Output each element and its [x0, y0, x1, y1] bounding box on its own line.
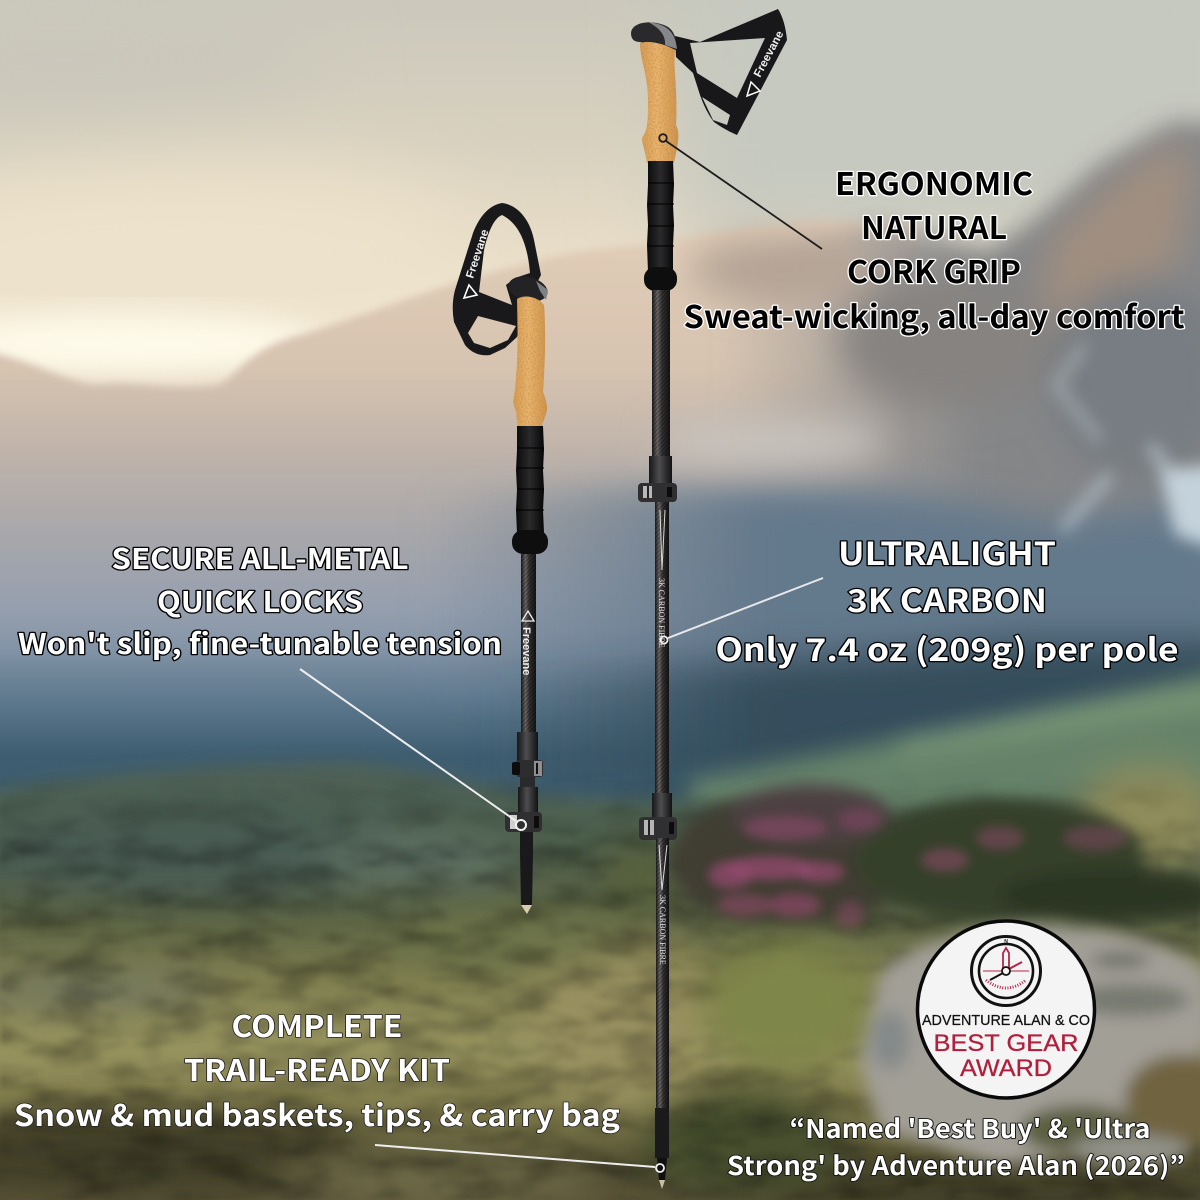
cork grip — [640, 42, 678, 163]
text block: kit — [14, 1004, 620, 1135]
palm cap — [631, 22, 677, 50]
badge text: BEST GEAR — [934, 1030, 1078, 1057]
text block: locks: QUICK LOCKS — [157, 580, 363, 621]
snow streaks — [1056, 345, 1200, 550]
icon: compass clock — [972, 936, 1040, 1006]
wrist strap, left pole — [453, 203, 541, 355]
award quote — [727, 1109, 1185, 1183]
rhododendron bushes — [670, 785, 1200, 928]
award badge — [918, 921, 1094, 1098]
badge text: ADVENTURE ALAN & CO — [922, 1013, 1090, 1029]
badge text: AWARD — [960, 1055, 1052, 1082]
foam grip — [512, 426, 548, 554]
text block: carbon: ULTRALIGHT — [838, 529, 1056, 575]
palm cap — [506, 273, 550, 305]
distant green slope — [690, 668, 1200, 850]
text block: carbon: Only 7.4 oz (209g) per pole — [716, 625, 1178, 671]
text block: locks: SECURE ALL-METAL — [112, 537, 409, 578]
callout leader: locks — [300, 669, 526, 830]
pole tip — [655, 1108, 669, 1189]
text block: carbon: 3K CARBON — [847, 576, 1047, 622]
icon: compass clock: N — [1004, 939, 1008, 945]
carbon shaft, lower — [656, 838, 669, 1108]
carbon shaft: Freevane — [520, 627, 532, 675]
text block: kit: TRAIL-READY KIT — [184, 1048, 450, 1090]
foam grip — [644, 161, 677, 291]
right trekking pole, extended — [631, 9, 787, 1189]
cork grip — [513, 297, 547, 428]
text block: kit: Snow & mud baskets, tips, & carry bag — [14, 1093, 620, 1135]
foreground hillside — [0, 762, 1200, 1200]
mountain mass — [700, 122, 1200, 700]
lower lock — [639, 817, 677, 840]
callout leader: carbon — [660, 578, 823, 644]
text block: kit: COMPLETE — [232, 1004, 402, 1046]
carbon shaft, middle: 3K CARBON FIBRE — [657, 578, 666, 648]
award quote: Strong' by Adventure Alan (2026)” — [727, 1146, 1185, 1183]
wrist strap, right pole — [675, 9, 787, 135]
lower section and locks — [505, 732, 543, 914]
grass mound — [705, 940, 875, 1070]
carbon shaft, lower: 3K CARBON FIBRE — [658, 895, 667, 965]
carbon shaft — [520, 554, 536, 732]
wrist strap, left pole: Freevane — [464, 228, 491, 280]
callout leader: kit — [375, 1145, 664, 1172]
sun glow at horizon — [0, 315, 320, 375]
left trekking pole, collapsed — [453, 203, 550, 914]
rock — [860, 925, 1200, 1165]
callout leader: cork grip — [659, 134, 822, 249]
wrist strap, right pole: Freevane — [752, 29, 786, 79]
grass mottling — [0, 760, 1200, 1200]
carbon shaft, middle — [655, 502, 669, 795]
carbon shaft, upper — [652, 290, 670, 457]
text block: locks: Won't slip, fine-tunable tension — [18, 622, 502, 663]
text block: carbon — [716, 529, 1178, 671]
text block: locks — [18, 537, 502, 663]
far peach ridge — [0, 220, 920, 660]
text block: cork grip: Sweat-wicking, all-day comfort — [684, 292, 1184, 337]
badge text — [922, 1013, 1090, 1082]
upper lock — [638, 483, 677, 502]
text block: cork grip: ERGONOMIC — [835, 159, 1033, 204]
award quote: “Named 'Best Buy' & 'Ultra — [790, 1109, 1150, 1146]
text block: cork grip: CORK GRIP — [847, 247, 1021, 292]
dark valley fog — [440, 640, 1200, 790]
text block: cork grip — [684, 159, 1184, 337]
text block: cork grip: NATURAL — [861, 203, 1007, 248]
